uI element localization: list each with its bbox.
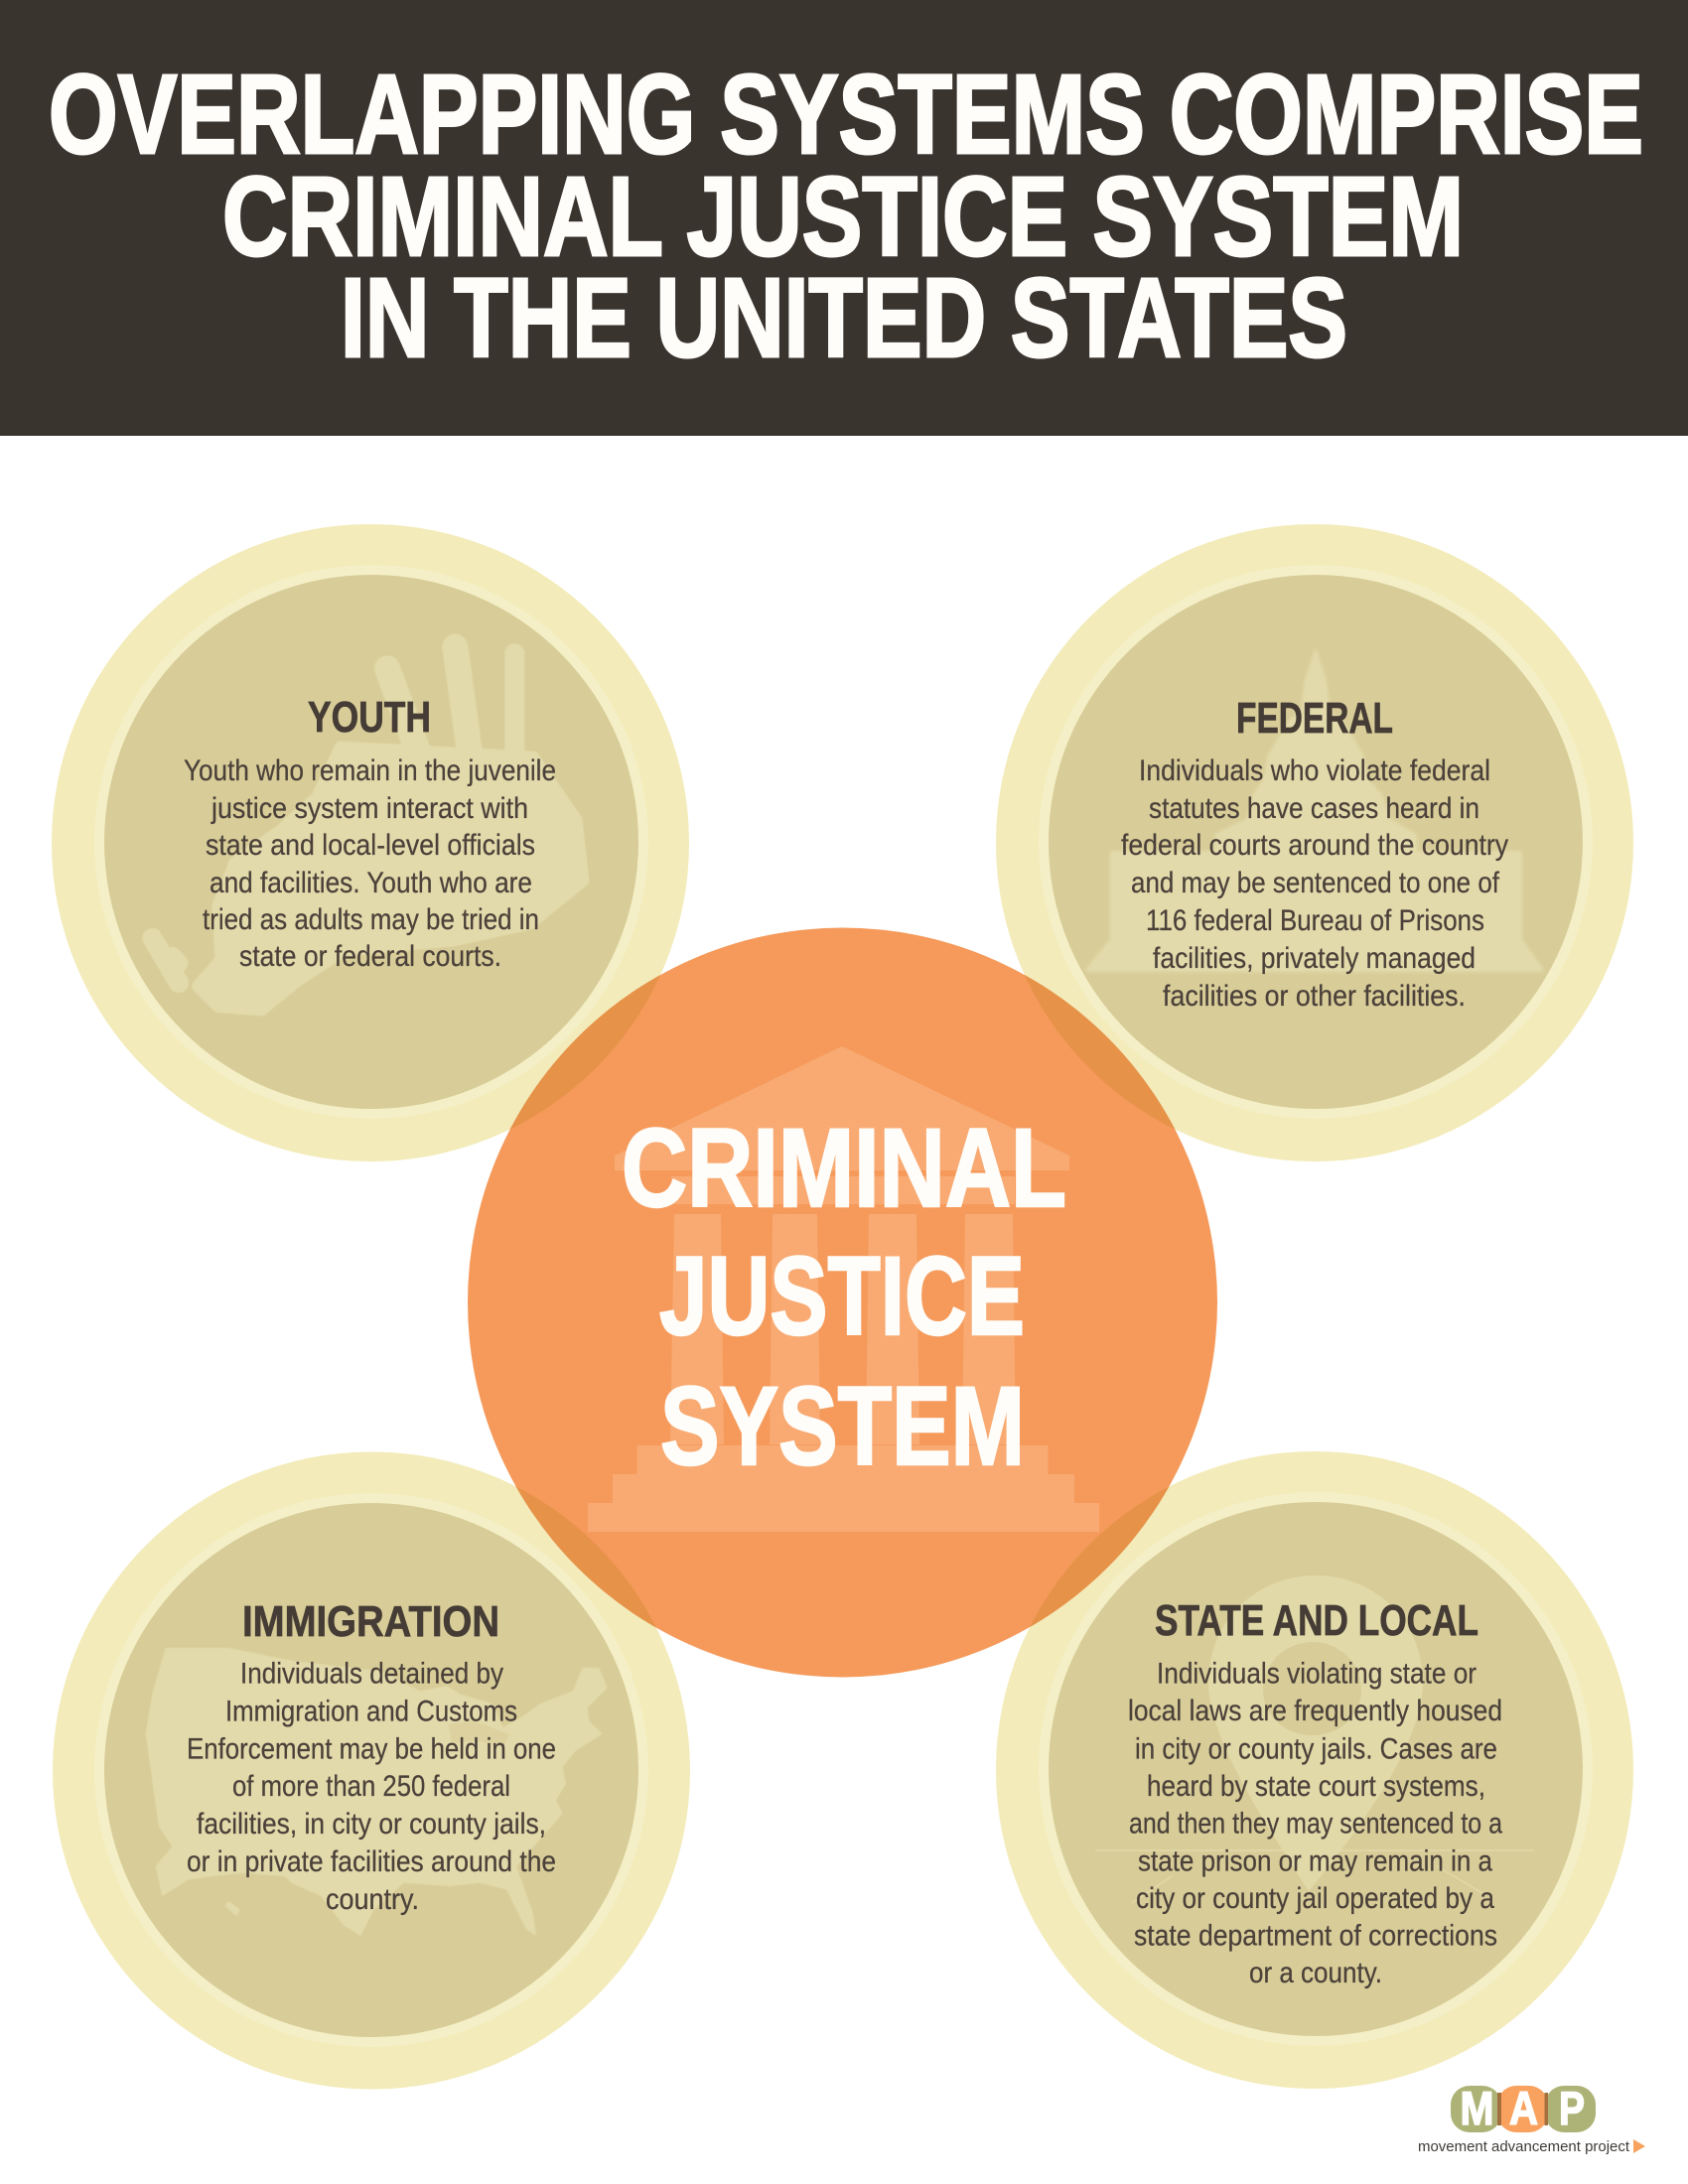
text block: youth: Youth who remain in the juvenile bbox=[184, 754, 556, 787]
logo: movement advancement project: A bbox=[1509, 2082, 1538, 2134]
text block: state and local: Individuals violating state or bbox=[1157, 1658, 1477, 1690]
text block: federal: facilities or other facilities. bbox=[1163, 980, 1466, 1013]
text block: youth bbox=[184, 754, 556, 973]
text block: youth: state or federal courts. bbox=[239, 940, 501, 973]
heading: state and local: STATE AND LOCAL bbox=[1155, 1596, 1478, 1645]
text block: state and local: state department of corrections bbox=[1134, 1920, 1497, 1952]
logo: movement advancement project: P bbox=[1559, 2082, 1585, 2134]
heading: immigration: IMMIGRATION bbox=[242, 1597, 499, 1646]
text block: federal: Individuals who violate federal bbox=[1139, 754, 1490, 787]
heading: centre label bbox=[622, 1106, 1066, 1488]
text block: immigration: Individuals detained by bbox=[240, 1658, 503, 1690]
text block: state and local: heard by state court systems, bbox=[1147, 1770, 1485, 1803]
text block: state and local: in city or county jails. Cases are bbox=[1135, 1733, 1497, 1765]
text block: state and local: and then they may sentenced to a bbox=[1129, 1807, 1502, 1841]
heading: centre label: JUSTICE bbox=[659, 1234, 1025, 1358]
text block: immigration: Enforcement may be held in one bbox=[187, 1733, 556, 1765]
text block: state and local: or a county. bbox=[1249, 1957, 1382, 1989]
text block: federal: statutes have cases heard in bbox=[1149, 792, 1479, 825]
text block: youth: justice system interact with bbox=[211, 792, 528, 825]
text block: federal: and may be sentenced to one of bbox=[1131, 867, 1500, 899]
panel: immigration bbox=[53, 1451, 690, 2089]
text block: state and local: local laws are frequently housed bbox=[1128, 1695, 1502, 1727]
panel: state and local bbox=[996, 1451, 1633, 2089]
panel: youth bbox=[52, 524, 689, 1161]
text block: immigration: facilities, in city or county jails, bbox=[197, 1808, 546, 1841]
text block: immigration: or in private facilities around the bbox=[187, 1845, 556, 1878]
overlap of centre circle with outer circles bbox=[510, 975, 1176, 1628]
logo: movement advancement project: movement advancement project bbox=[1418, 2138, 1630, 2155]
text block: federal: federal courts around the country bbox=[1121, 829, 1508, 862]
panel: federal bbox=[996, 524, 1633, 1161]
heading: centre label: SYSTEM bbox=[660, 1364, 1025, 1488]
heading: federal: FEDERAL bbox=[1236, 694, 1393, 743]
text block: immigration: of more than 250 federal bbox=[232, 1770, 510, 1803]
heading: youth: YOUTH bbox=[308, 693, 431, 742]
text block: immigration: country. bbox=[326, 1883, 419, 1916]
text block: immigration bbox=[187, 1658, 556, 1916]
logo: movement advancement project bbox=[1418, 2082, 1645, 2155]
text block: immigration: Immigration and Customs bbox=[225, 1696, 517, 1727]
text block: youth: and facilities. Youth who are bbox=[210, 867, 532, 899]
icon: hand print bbox=[152, 647, 583, 1010]
text block: youth: state and local-level officials bbox=[206, 829, 535, 862]
icon: map of the United States bbox=[146, 1648, 608, 1936]
logo: movement advancement project: M bbox=[1460, 2082, 1493, 2134]
text block: state and local: state prison or may remain in a bbox=[1138, 1844, 1492, 1878]
icon: map pin bbox=[1095, 1575, 1534, 1903]
icon: capitol building bbox=[1086, 647, 1543, 972]
text block: state and local: city or county jail operated by a bbox=[1136, 1882, 1494, 1915]
text block: federal: 116 federal Bureau of Prisons bbox=[1146, 904, 1484, 937]
heading: centre label: CRIMINAL bbox=[622, 1106, 1066, 1230]
text block: state and local bbox=[1128, 1658, 1502, 1989]
title: IN THE UNITED STATES bbox=[341, 255, 1347, 380]
icon: courthouse bbox=[588, 1046, 1099, 1532]
title bbox=[49, 52, 1643, 380]
text block: federal: facilities, privately managed bbox=[1153, 942, 1476, 975]
text block: federal bbox=[1121, 754, 1508, 1013]
panel: criminal justice system bbox=[468, 927, 1217, 1678]
text block: youth: tried as adults may be tried in bbox=[203, 903, 539, 936]
header banner bbox=[0, 0, 1688, 436]
